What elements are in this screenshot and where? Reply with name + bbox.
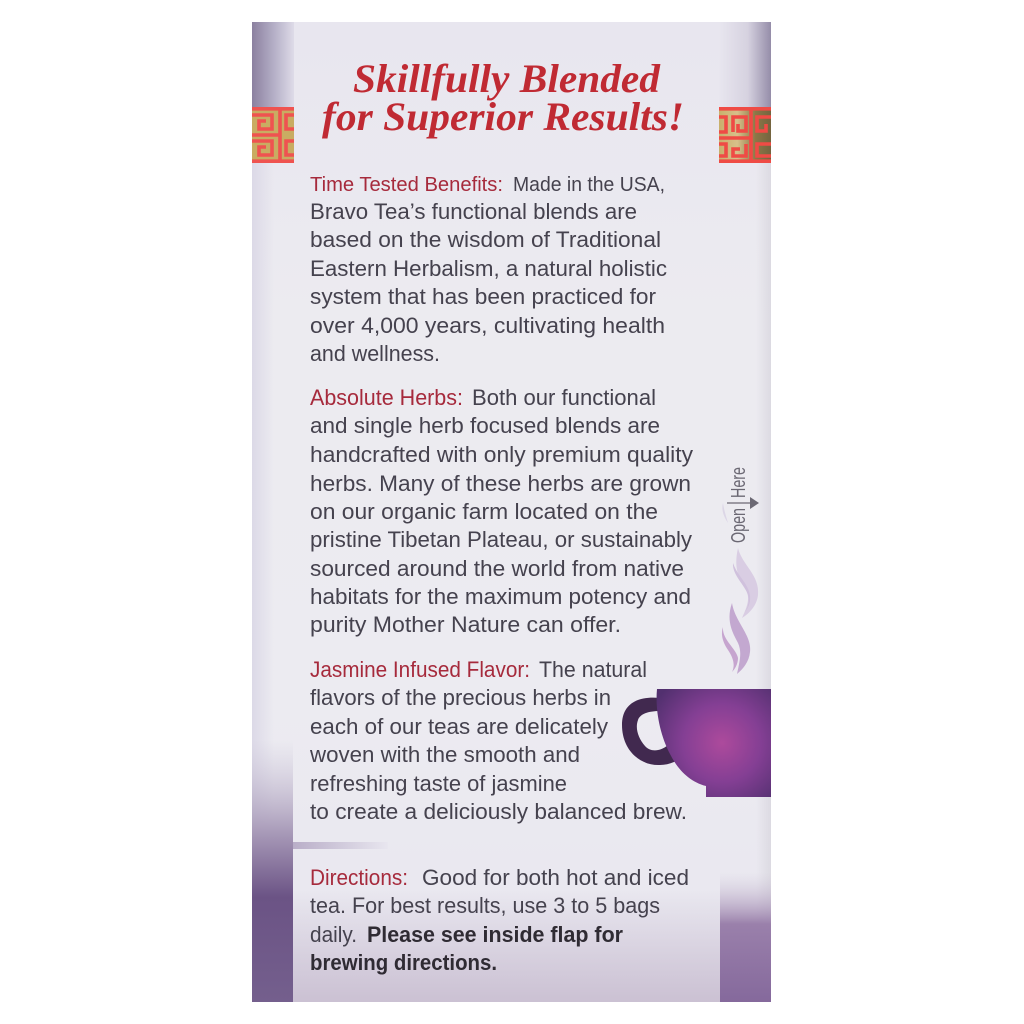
text block: time tested benefits: system that has been practiced for <box>310 284 656 309</box>
text block: time tested benefits: Time Tested Benefits: <box>310 173 503 196</box>
text block: absolute herbs: on our organic farm located on the <box>310 499 658 524</box>
text block: time tested benefits: over 4,000 years, cultivating health <box>310 313 665 338</box>
text block: time tested benefits: and wellness. <box>310 341 440 366</box>
text block: jasmine infused flavor <box>309 657 687 824</box>
text block: jasmine infused flavor: to create a deliciously balanced brew. <box>310 799 687 824</box>
icon: purple tea cup <box>622 689 771 797</box>
text block: absolute herbs: purity Mother Nature can offer. <box>310 612 621 637</box>
text block: directions: daily. <box>310 922 357 947</box>
icon: right Greek key ornament <box>719 107 771 163</box>
open here label with arrow <box>727 467 759 543</box>
text block: time tested benefits: Made in the USA, <box>513 173 665 196</box>
text block: absolute herbs: Absolute Herbs: <box>310 385 463 410</box>
title: for Superior Results! <box>322 94 684 139</box>
text block: directions: tea. For best results, use 3 to 5 bags <box>310 893 660 918</box>
text block: absolute herbs <box>310 385 693 637</box>
text block: time tested benefits: based on the wisdom of Traditional <box>310 227 661 252</box>
text block: absolute herbs: sourced around the world from native <box>310 556 684 581</box>
text block: time tested benefits: Eastern Herbalism, a natural holistic <box>310 256 667 281</box>
text block: absolute herbs: pristine Tibetan Plateau, or sustainably <box>310 527 692 552</box>
panel: tea box background <box>252 22 771 1002</box>
icon: left Greek key ornament <box>252 107 294 163</box>
open here label with arrow: Open <box>728 508 750 543</box>
text block: time tested benefits <box>310 173 667 366</box>
text block: absolute herbs: and single herb focused blends are <box>310 413 660 438</box>
text block: absolute herbs: handcrafted with only premium quality <box>310 442 693 467</box>
text block: directions: brewing directions. <box>310 950 497 975</box>
text block: jasmine infused flavor: The natural <box>539 657 647 682</box>
text block: jasmine infused flavor: Jasmine Infused Flavor: <box>310 657 530 682</box>
title: Skillfully Blended <box>353 56 661 101</box>
text block: absolute herbs: Both our functional <box>472 385 656 410</box>
text block: time tested benefits: Bravo Tea’s functional blends are <box>310 199 637 224</box>
text block: directions: Good for both hot and iced <box>422 865 689 890</box>
text block: directions: Directions: <box>310 865 408 890</box>
text block: jasmine infused flavor: woven with the smooth and <box>309 742 580 767</box>
text block: absolute herbs: habitats for the maximum potency and <box>310 584 691 609</box>
text block: directions <box>310 865 689 975</box>
icon: steam <box>722 503 758 674</box>
text block: jasmine infused flavor: flavors of the precious herbs in <box>310 685 611 710</box>
text block: jasmine infused flavor: each of our teas are delicately <box>310 714 608 739</box>
title <box>322 56 684 139</box>
text block: jasmine infused flavor: refreshing taste of jasmine <box>310 771 567 796</box>
open here label with arrow: Here <box>728 467 750 498</box>
text block: directions: Please see inside flap for <box>367 922 623 947</box>
text block: absolute herbs: herbs. Many of these herbs are grown <box>310 471 691 496</box>
